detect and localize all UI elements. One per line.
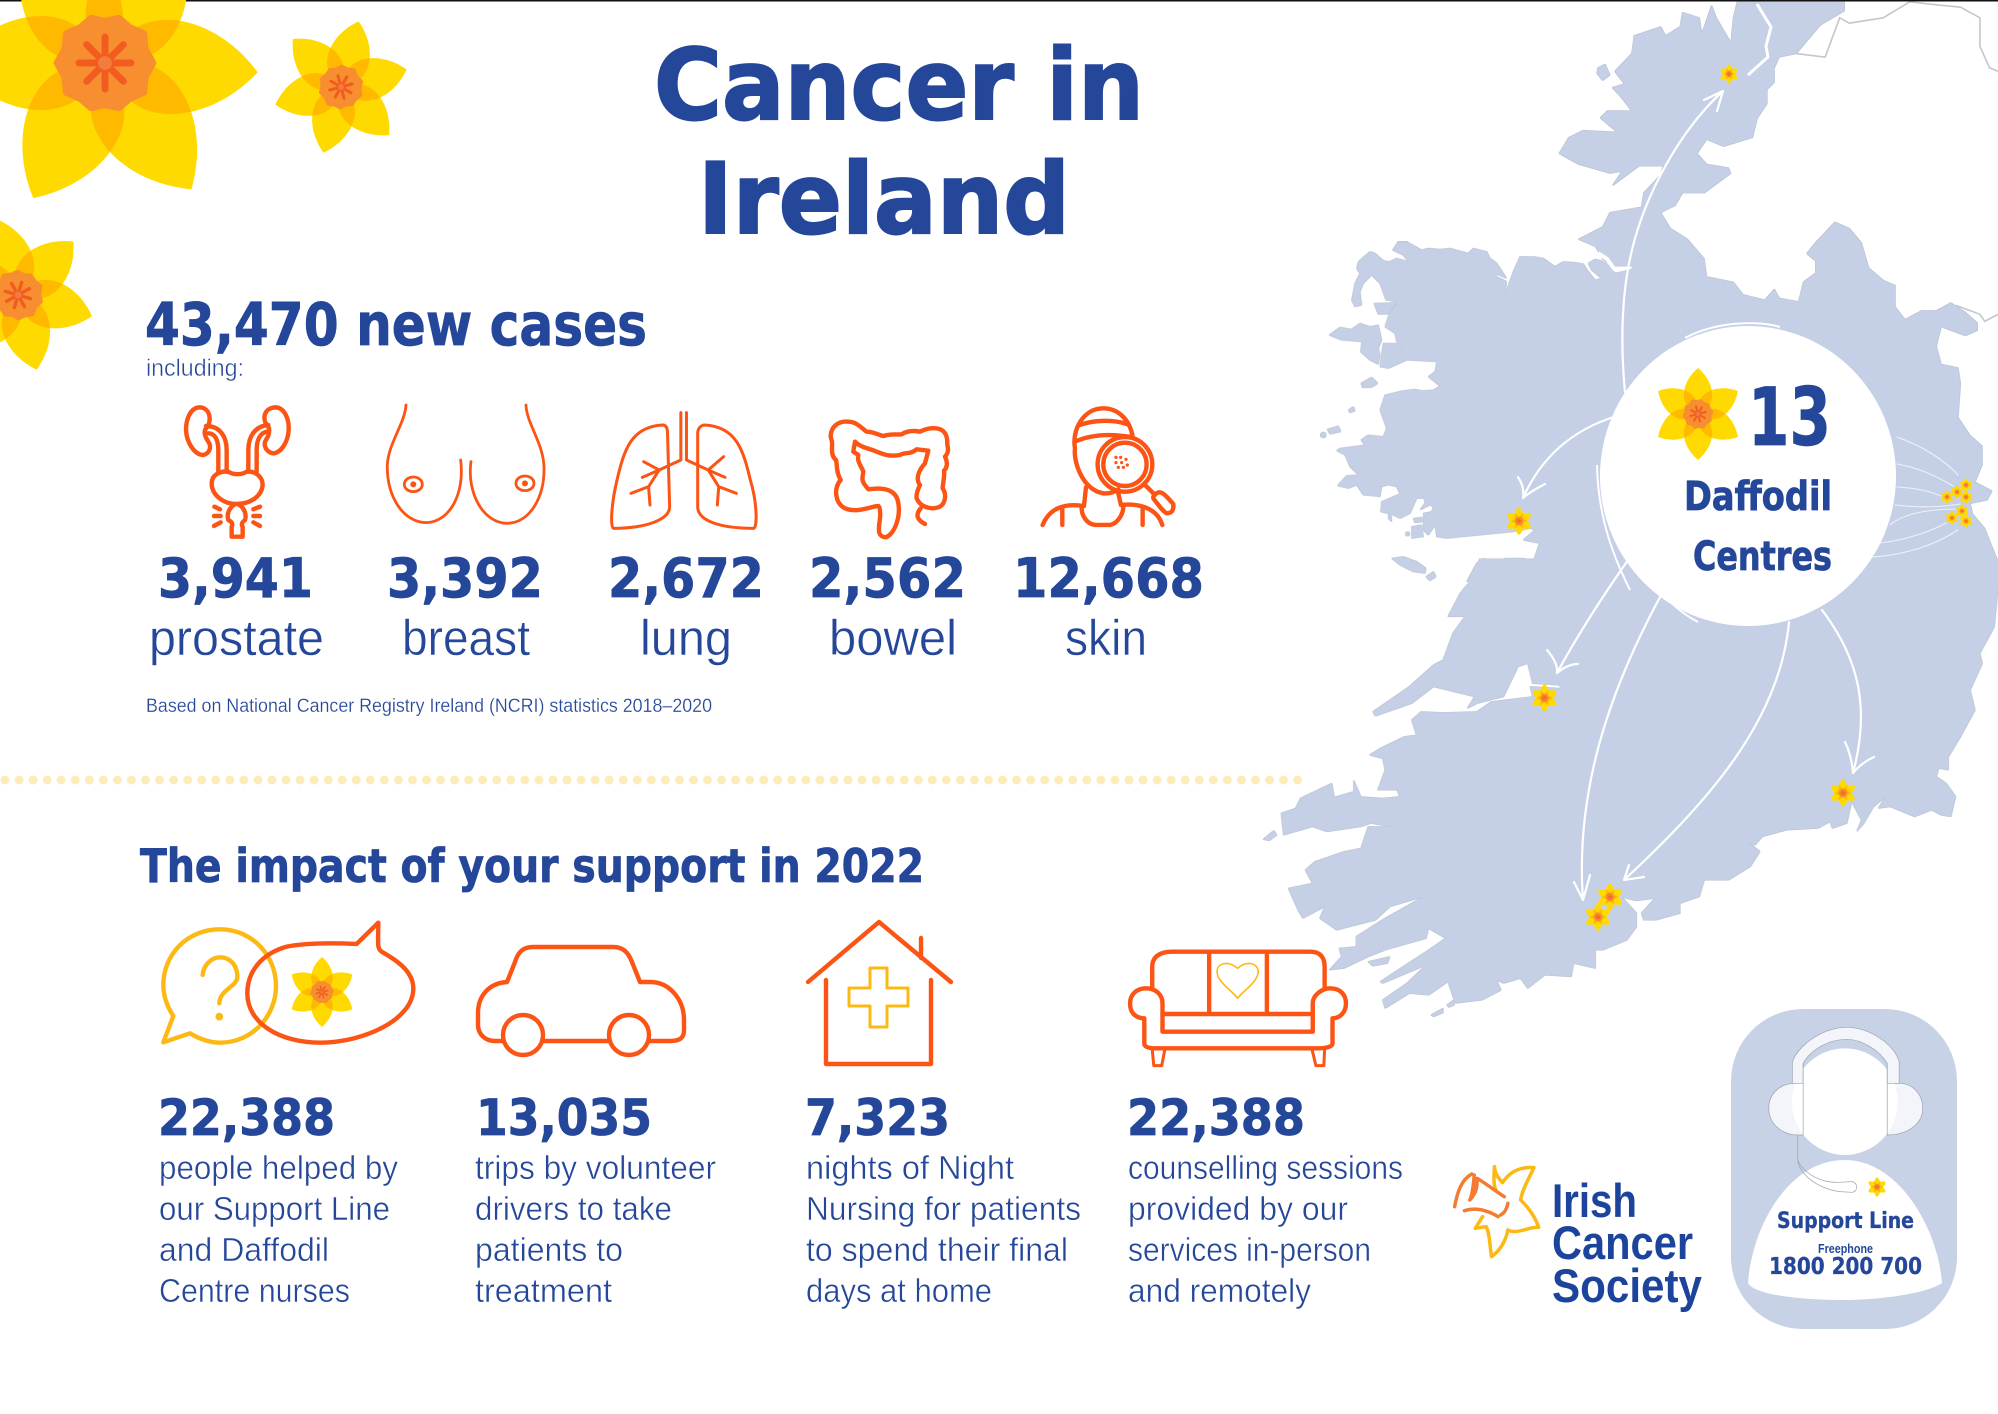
marker: Waterford (1824, 774, 1862, 812)
stat: counselling: counselling sessions (1128, 1149, 1403, 1186)
marker: Galway (1500, 502, 1538, 540)
stat: counselling (1127, 1089, 1403, 1309)
stat: lung: lung (640, 610, 732, 666)
arrow: to Donegal (1622, 91, 1723, 392)
wordmark: Society (1552, 1259, 1702, 1312)
icon: speech bubbles with question and daffodil (163, 923, 413, 1043)
stat: bowel: bowel (829, 610, 957, 666)
icon: breast (387, 405, 544, 523)
heading: new cases: 43,470 new cases (145, 290, 647, 359)
stat: breast: 3,392 (387, 547, 543, 610)
icon: bowel (831, 422, 948, 537)
marker: Limerick (1525, 679, 1564, 717)
marker: Cork two (1579, 898, 1617, 936)
wordmark (1552, 1174, 1702, 1312)
stat: skin: 12,668 (1013, 547, 1204, 610)
icon: small daffodil (1863, 1173, 1891, 1201)
marker: Cork one (1591, 878, 1629, 916)
land: Connacht and west coast (1321, 242, 1635, 582)
marker: Dublin six (1942, 508, 1962, 528)
stat: skin: skin (1065, 610, 1147, 666)
stat: counselling: 22,388 (1127, 1089, 1305, 1147)
stat: volunteer driver trips (475, 1089, 716, 1309)
arrow: to Galway (1518, 416, 1617, 498)
stat: night nursing: nights of Night (806, 1149, 1014, 1186)
map: land masses (1263, 0, 1998, 1017)
icon: house with medical cross (808, 922, 951, 1064)
label: Support Line: Support Line (1777, 1209, 1914, 1234)
wordmark: Irish (1552, 1174, 1637, 1227)
label: Centres: Centres (1693, 534, 1832, 580)
map location daffodils (1500, 60, 1976, 936)
heading: impact of support: The impact of your support in 2022 (140, 839, 924, 893)
decorative daffodils top left (0, 0, 425, 392)
arrows: to Dublin (1873, 437, 1960, 557)
land: Munster and south coast (1263, 559, 1998, 1017)
stat: volunteer driver trips: patients to (475, 1231, 623, 1268)
marker: Dublin seven (1956, 511, 1976, 531)
footnote: Based on National Cancer Registry Ireland (NCRI) statistics 2018–2020 (146, 696, 712, 717)
marker: Donegal (1715, 60, 1743, 88)
stat: support line helped: Centre nurses (159, 1272, 350, 1309)
panel: cancer type icons (186, 405, 1173, 537)
arrow: to Waterford (1822, 610, 1874, 773)
map: Northern Ireland border line (1796, 2, 1998, 321)
marker: Dublin four (1956, 487, 1976, 507)
marker: Dublin two (1947, 482, 1967, 502)
arrow: to Cork 2 (1624, 622, 1789, 880)
icon: large daffodil (0, 0, 261, 220)
icon: daffodil (1635, 350, 1761, 478)
stat: support line helped: and Daffodil (159, 1231, 329, 1268)
land: north and east (1559, 0, 1998, 562)
stat: volunteer driver trips: trips by volunteer (475, 1149, 716, 1186)
icon: left daffodil (0, 198, 114, 392)
stat: counselling: and remotely (1128, 1272, 1311, 1309)
icon: skin check with magnifier (1043, 408, 1173, 525)
stat: night nursing: to spend their final (806, 1231, 1068, 1268)
panel: support line (1731, 1009, 1957, 1329)
arrow: to Cork 1 (1574, 597, 1660, 900)
stat: night nursing (805, 1089, 1081, 1309)
stat: breast: breast (402, 610, 530, 666)
icon: logo daffodil (1455, 1167, 1539, 1257)
stat: prostate: prostate (149, 610, 324, 666)
wordmark: Cancer (1552, 1216, 1693, 1269)
icon: small daffodil (257, 2, 425, 172)
stat: counselling: services in-person (1128, 1231, 1371, 1268)
subheading: including: including: (146, 355, 244, 382)
stat: support line helped: people helped by (159, 1149, 398, 1186)
stat: lung (608, 547, 764, 666)
title: Cancer in (654, 29, 1144, 143)
stat: lung: 2,672 (608, 547, 764, 610)
stat: night nursing: days at home (806, 1272, 992, 1309)
stat: prostate: 3,941 (158, 547, 313, 610)
icon: lungs (612, 413, 756, 528)
stat: volunteer driver trips: drivers to take (475, 1190, 672, 1227)
stat: support line helped (158, 1089, 398, 1309)
marker: Dublin three (1937, 487, 1957, 507)
title (654, 29, 1144, 257)
stat: skin (1013, 547, 1204, 666)
logo: Irish Cancer Society (1455, 1167, 1702, 1312)
map of Ireland (1263, 0, 1998, 1017)
stat: breast (387, 547, 543, 666)
stat: support line helped: 22,388 (158, 1089, 335, 1147)
stat: counselling: provided by our (1128, 1190, 1348, 1227)
icon: sofa with heart (1130, 952, 1346, 1066)
marker: Dublin one (1956, 475, 1976, 495)
stat: prostate (149, 547, 324, 666)
map: sea loughs (1598, 4, 1771, 270)
stat: support line helped: our Support Line (159, 1190, 390, 1227)
top edge line (0, 0, 1998, 2)
icon: prostate (186, 407, 289, 537)
label: Daffodil: Daffodil (1684, 474, 1832, 520)
title: Ireland (698, 143, 1070, 257)
stats: cancer types (149, 547, 1204, 666)
stat: night nursing: Nursing for patients (806, 1190, 1081, 1227)
arrow: to Limerick (1547, 560, 1628, 673)
label: phone number: 1800 200 700 (1769, 1254, 1922, 1280)
stat: volunteer driver trips: 13,035 (476, 1089, 652, 1147)
label: Freephone: Freephone (1818, 1242, 1873, 1256)
stat: bowel: 2,562 (809, 547, 966, 610)
marker: Dublin five (1952, 501, 1972, 521)
number 13: 13 (1748, 371, 1831, 464)
icon: headset operator (1748, 1027, 1942, 1300)
icon: car (478, 947, 684, 1055)
stat: bowel (809, 547, 966, 666)
stat: volunteer driver trips: treatment (475, 1272, 612, 1309)
arrows from Daffodil Centres circle to locations (1518, 91, 1960, 900)
white circle panel: Daffodil Centres (1597, 323, 1896, 626)
stat: night nursing: 7,323 (805, 1089, 950, 1147)
